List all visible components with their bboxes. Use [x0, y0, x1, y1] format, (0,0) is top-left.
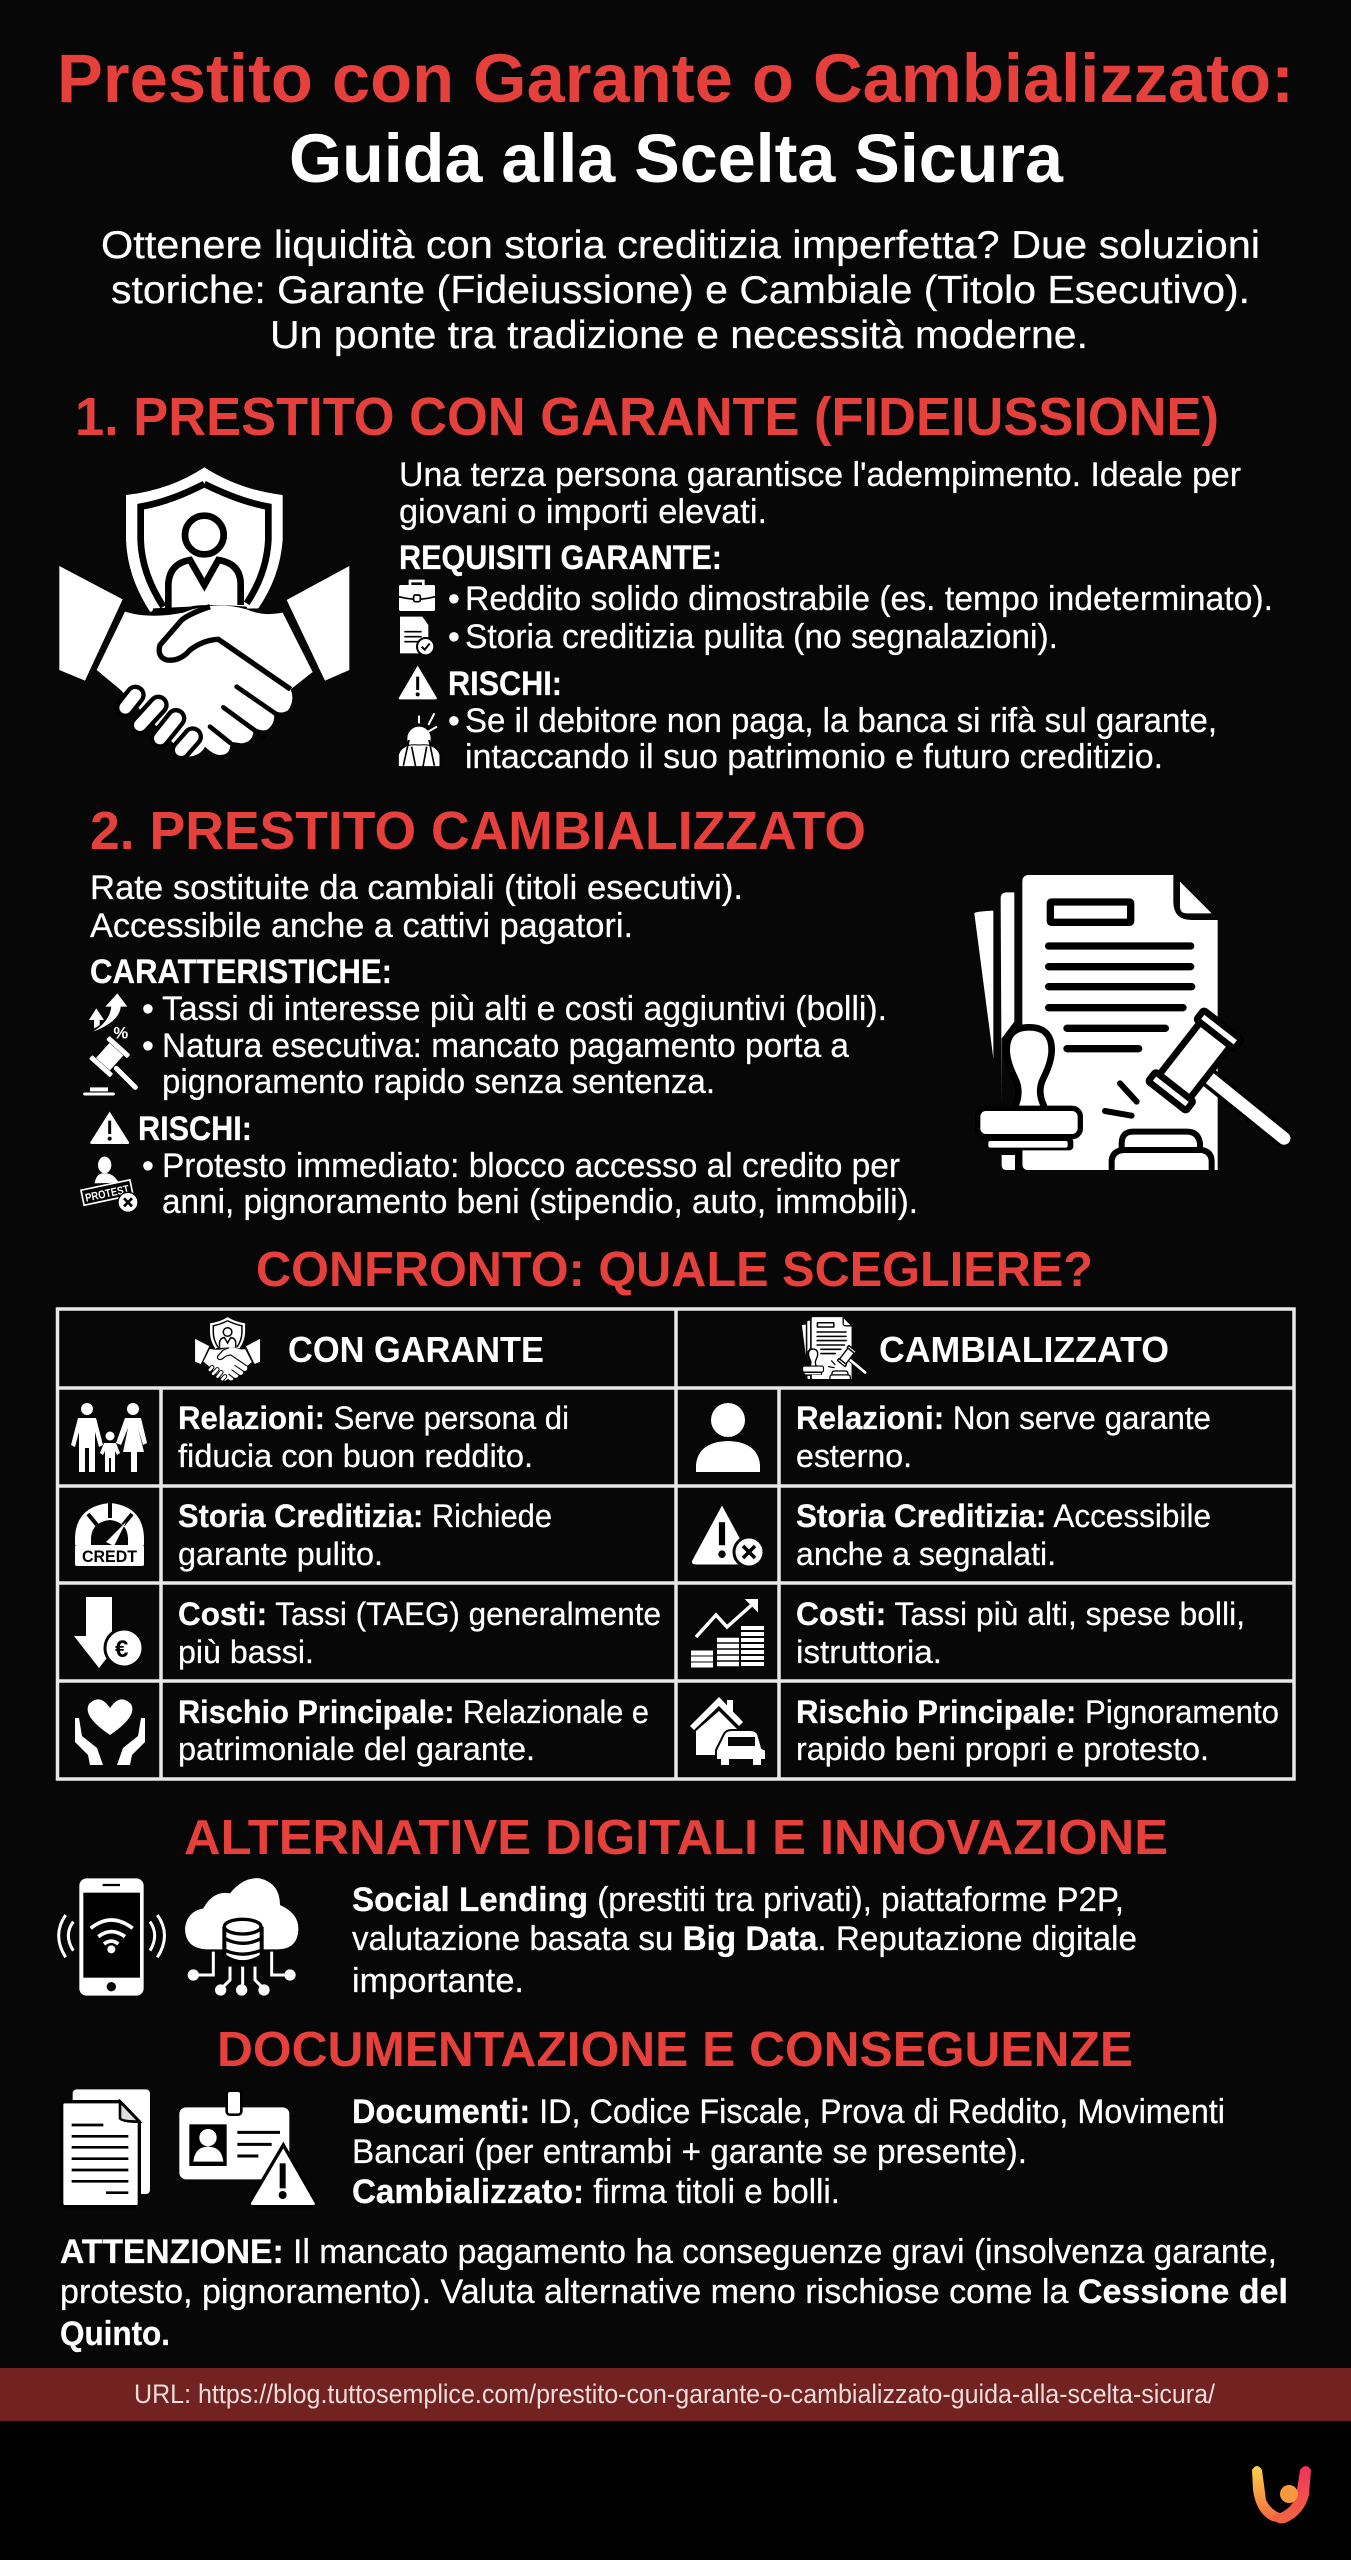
caratteristiche: Natura esecutiva: mancato pagamento porta a: [162, 1027, 849, 1065]
header: cambializzato: CAMBIALIZZATO: [879, 1329, 1169, 1370]
icon: chart with coins: [691, 1600, 764, 1665]
row: storia creditizia cambializzato: [692, 1498, 1211, 1572]
caratteristiche: •: [142, 990, 154, 1028]
section 1 description: giovani o importi elevati.: [399, 493, 767, 531]
documentation text: Bancari (per entrambi + garante se presente).: [352, 2133, 1027, 2171]
icon: gavel: [85, 1036, 135, 1094]
digital alternatives text: importante.: [352, 1962, 524, 2000]
intro text: Ottenere liquidità con storia creditizia imperfetta? Due soluzioni: [101, 224, 1260, 267]
requisiti garante: Storia creditizia pulita (no segnalazioni).: [465, 618, 1058, 656]
section 1 description: [399, 456, 1241, 531]
requisiti garante: REQUISITI GARANTE:: [399, 539, 722, 577]
rischi garante: •: [448, 702, 460, 740]
header: con garante: [195, 1317, 544, 1381]
row: storia creditizia cambializzato: anche a segnalati.: [796, 1536, 1056, 1572]
digital alternatives text: Social Lending (prestiti tra privati), piattaforme P2P,: [352, 1881, 1124, 1919]
heading: documentation: DOCUMENTAZIONE E CONSEGUENZE: [217, 2023, 1133, 2077]
digital alternatives text: valutazione basata su Big Data. Reputazione digitale: [352, 1920, 1137, 1958]
row: rischio cambializzato: [690, 1694, 1279, 1767]
row: costi cambializzato: [691, 1596, 1245, 1670]
icon: shield and handshake: [59, 467, 349, 757]
heading: comparison: CONFRONTO: QUALE SCEGLIERE?: [256, 1243, 1093, 1297]
row: rischio cambializzato: rapido beni propri e protesto.: [796, 1731, 1209, 1767]
title: Prestito con Garante o Cambializzato:: [57, 40, 1294, 117]
warning note: Quinto.: [60, 2315, 170, 2353]
row: costi con garante: più bassi.: [178, 1634, 314, 1670]
header: cambializzato: [802, 1317, 1169, 1379]
icon: stressed person: [398, 713, 440, 767]
heading: section 2: 2. PRESTITO CAMBIALIZZATO: [90, 801, 866, 861]
warning note: ATTENZIONE: Il mancato pagamento ha conseguenze gravi (insolvenza garante,: [60, 2233, 1277, 2271]
icon: down arrow with euro: €: [115, 1636, 128, 1663]
section 2 description: [90, 869, 743, 945]
intro text: Un ponte tra tradizione e necessità moderne.: [270, 314, 1088, 357]
icon: house and car: [690, 1697, 766, 1766]
icon: family: [71, 1403, 147, 1472]
rischi garante: Se il debitore non paga, la banca si rifà sul garante,: [465, 702, 1217, 740]
row: storia creditizia cambializzato: Storia Creditizia: Accessibile: [796, 1498, 1211, 1534]
icon: rising rate: [89, 993, 128, 1043]
icon: documents, stamp and gavel: [974, 875, 1316, 1170]
icon: warning: [90, 1112, 129, 1144]
icon: smartphone with wifi: [59, 1878, 164, 1996]
caratteristiche: [85, 953, 887, 1101]
row: relazioni con garante: [71, 1400, 569, 1474]
logo: [1252, 2466, 1311, 2523]
url footer bar: URL: https://blog.tuttosemplice.com/prestito-con-garante-o-cambializzato-guida-alla-scelta-sicura/: [134, 2379, 1215, 2409]
intro text: storiche: Garante (Fideiussione) e Cambiale (Titolo Esecutivo).: [111, 269, 1250, 312]
rischi cambializzato: •: [142, 1147, 154, 1185]
icon: heart in hands: [75, 1699, 145, 1765]
icon: briefcase: [399, 581, 435, 611]
rischi cambializzato: RISCHI:: [138, 1110, 252, 1148]
warning note: protesto, pignoramento). Valuta alternative meno rischiose come la Cessione del: [60, 2273, 1288, 2311]
rischi cambializzato: Protesto immediato: blocco accesso al credito per: [162, 1147, 900, 1185]
header: con garante: CON GARANTE: [288, 1329, 544, 1370]
row: costi con garante: [74, 1596, 661, 1670]
icon: warning with x: [692, 1506, 764, 1567]
rischi garante: [398, 665, 1217, 776]
row: rischio con garante: Rischio Principale: Relazionale e: [178, 1694, 649, 1730]
title: Guida alla Scelta Sicura: [289, 120, 1064, 197]
caratteristiche: CARATTERISTICHE:: [90, 953, 392, 991]
rischi cambializzato: [81, 1110, 918, 1221]
row: relazioni cambializzato: [696, 1400, 1211, 1474]
icon: credit gauge: CREDT: [82, 1547, 138, 1566]
icon: warning: [399, 666, 437, 699]
row: rischio cambializzato: Rischio Principale: Pignoramento: [796, 1694, 1279, 1730]
heading: section 1: 1. PRESTITO CON GARANTE (FIDEIUSSIONE): [75, 387, 1219, 447]
warning note: [60, 2233, 1288, 2353]
rischi cambializzato: anni, pignoramento beni (stipendio, auto, immobili).: [162, 1183, 918, 1221]
icon: paper documents: [62, 2089, 150, 2207]
icon: rising rate: %: [113, 1024, 128, 1043]
row: rischio con garante: [75, 1694, 649, 1767]
section 2 description: Rate sostituite da cambiali (titoli esecutivi).: [90, 869, 743, 907]
row: relazioni con garante: Relazioni: Serve persona di: [178, 1400, 569, 1436]
requisiti garante: Reddito solido dimostrabile (es. tempo indeterminato).: [465, 580, 1273, 618]
row: storia creditizia con garante: [75, 1498, 552, 1572]
caratteristiche: •: [142, 1027, 154, 1065]
section 2 description: Accessibile anche a cattivi pagatori.: [90, 907, 633, 945]
requisiti garante: •: [448, 618, 460, 656]
icon: protest stamp: PROTEST: [84, 1184, 130, 1205]
icon: cloud database: [185, 1878, 298, 1996]
row: relazioni cambializzato: Relazioni: Non serve garante: [796, 1400, 1211, 1436]
section 1 description: Una terza persona garantisce l'adempimento. Ideale per: [399, 456, 1241, 494]
title: [57, 40, 1294, 197]
row: relazioni con garante: fiducia con buon reddito.: [178, 1438, 533, 1474]
row: relazioni cambializzato: esterno.: [796, 1438, 912, 1474]
row: costi con garante: Costi: Tassi (TAEG) generalmente: [178, 1596, 661, 1632]
documentation text: Documenti: ID, Codice Fiscale, Prova di Reddito, Movimenti: [352, 2093, 1225, 2131]
row: costi cambializzato: istruttoria.: [796, 1634, 942, 1670]
icon: id badge with warning: [179, 2091, 317, 2207]
comparison table: [58, 1309, 1294, 1779]
url footer bar: [0, 2368, 1351, 2421]
row: costi cambializzato: Costi: Tassi più alti, spese bolli,: [796, 1596, 1245, 1632]
icon: protest stamp: [81, 1157, 138, 1212]
row: storia creditizia con garante: garante pulito.: [178, 1536, 383, 1572]
intro text: [101, 224, 1260, 357]
icon: credit gauge: [75, 1503, 144, 1566]
rischi garante: intaccando il suo patrimonio e futuro creditizio.: [465, 738, 1163, 776]
icon: person: [696, 1403, 760, 1472]
rischi garante: RISCHI:: [448, 665, 562, 703]
row: storia creditizia con garante: Storia Creditizia: Richiede: [178, 1498, 552, 1534]
row: rischio con garante: patrimoniale del garante.: [178, 1731, 535, 1767]
heading: digital alternatives: ALTERNATIVE DIGITALI E INNOVAZIONE: [184, 1811, 1168, 1865]
requisiti garante: •: [448, 580, 460, 618]
digital alternatives text: [352, 1881, 1137, 2000]
requisiti garante: [399, 539, 1273, 656]
icon: down arrow with euro: [74, 1597, 143, 1668]
caratteristiche: Tassi di interesse più alti e costi aggiuntivi (bolli).: [162, 990, 887, 1028]
caratteristiche: pignoramento rapido senza sentenza.: [162, 1063, 715, 1101]
icon: document with check: [400, 617, 434, 655]
documentation text: Cambializzato: firma titoli e bolli.: [352, 2173, 840, 2211]
table grid: [58, 1309, 1294, 1779]
documentation text: [352, 2093, 1225, 2211]
